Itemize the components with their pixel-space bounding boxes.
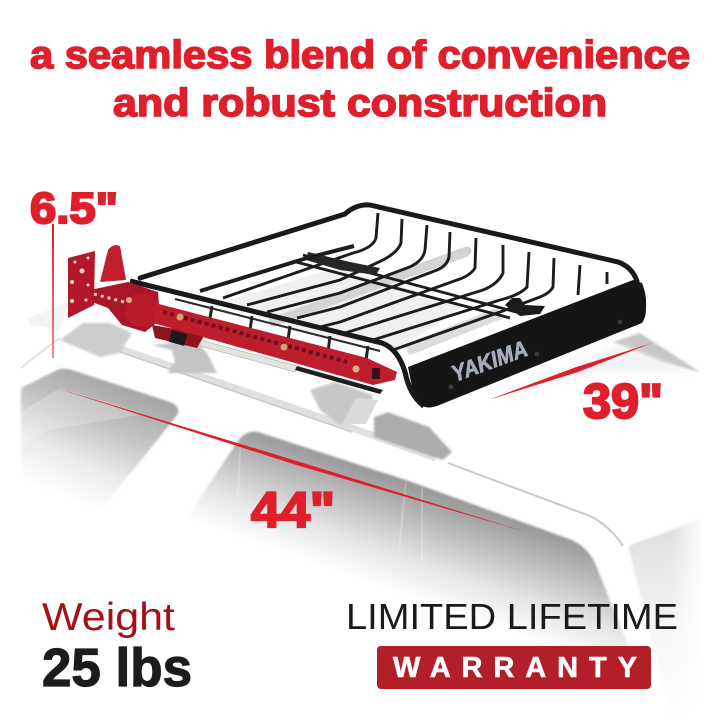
warranty badge bbox=[346, 596, 678, 689]
jack: mechanism bbox=[90, 282, 160, 332]
jack: handle block bbox=[152, 325, 205, 348]
weight value: 25 lbs bbox=[42, 638, 192, 698]
basket: silver crossbars seen through the floor bbox=[340, 251, 467, 297]
car: left window bbox=[21, 369, 178, 510]
car roof illustration bbox=[21, 303, 704, 720]
basket: inner side rail bbox=[200, 246, 354, 291]
jack: lower black rail bbox=[295, 366, 383, 394]
jack: plate holes bbox=[70, 256, 90, 303]
dimension: width 39 inches bbox=[488, 343, 663, 429]
jack: bolts bbox=[176, 314, 380, 379]
jack: steel beam bbox=[153, 303, 397, 385]
dimension: length 44 inches bbox=[53, 387, 526, 538]
basket: top outer rail bbox=[140, 205, 637, 281]
jack: beam holes bbox=[163, 312, 347, 362]
length line bbox=[53, 387, 526, 532]
jack: top horn bbox=[100, 245, 126, 282]
jack: silver tube bbox=[200, 340, 297, 372]
car: roof rails bbox=[118, 348, 436, 458]
basket: front side rail bbox=[130, 281, 424, 406]
height label: 6.5" bbox=[30, 184, 118, 233]
warranty box bbox=[377, 646, 651, 689]
basket: rail brackets bbox=[210, 306, 368, 360]
warranty heading: LIMITED LIFETIME bbox=[346, 596, 678, 637]
height line bbox=[52, 224, 54, 358]
red hi-lift jack bbox=[68, 245, 397, 394]
title bbox=[30, 34, 690, 125]
front wind fairing bbox=[408, 280, 646, 408]
car: upper body line bbox=[21, 338, 60, 368]
car: rack shadow on right bbox=[613, 333, 700, 372]
car: rack feet bbox=[60, 323, 132, 357]
width label: 39" bbox=[583, 375, 663, 429]
fairing: YAKIMA logo: YAKIMA bbox=[448, 335, 531, 387]
fairing: rivets bbox=[449, 320, 622, 389]
title: and robust construction bbox=[113, 82, 607, 125]
width line bbox=[488, 343, 652, 400]
basket: clamps bbox=[306, 252, 380, 275]
roof basket bbox=[130, 205, 637, 406]
weight label: Weight bbox=[42, 596, 175, 639]
warranty text: WARRANTY bbox=[393, 652, 637, 684]
car: main rear window bbox=[185, 432, 630, 650]
jack: mounting plate bbox=[68, 251, 95, 318]
basket: floor wires and hoops bbox=[223, 213, 607, 350]
car: right body panel bbox=[628, 519, 701, 720]
length label: 44" bbox=[251, 482, 335, 538]
basket: mounting crossmembers bbox=[296, 255, 520, 318]
weight spec bbox=[42, 596, 192, 698]
car: roof edge line bbox=[448, 463, 623, 546]
fairing: black panel bbox=[408, 280, 646, 408]
title: a seamless blend of convenience bbox=[30, 34, 690, 77]
